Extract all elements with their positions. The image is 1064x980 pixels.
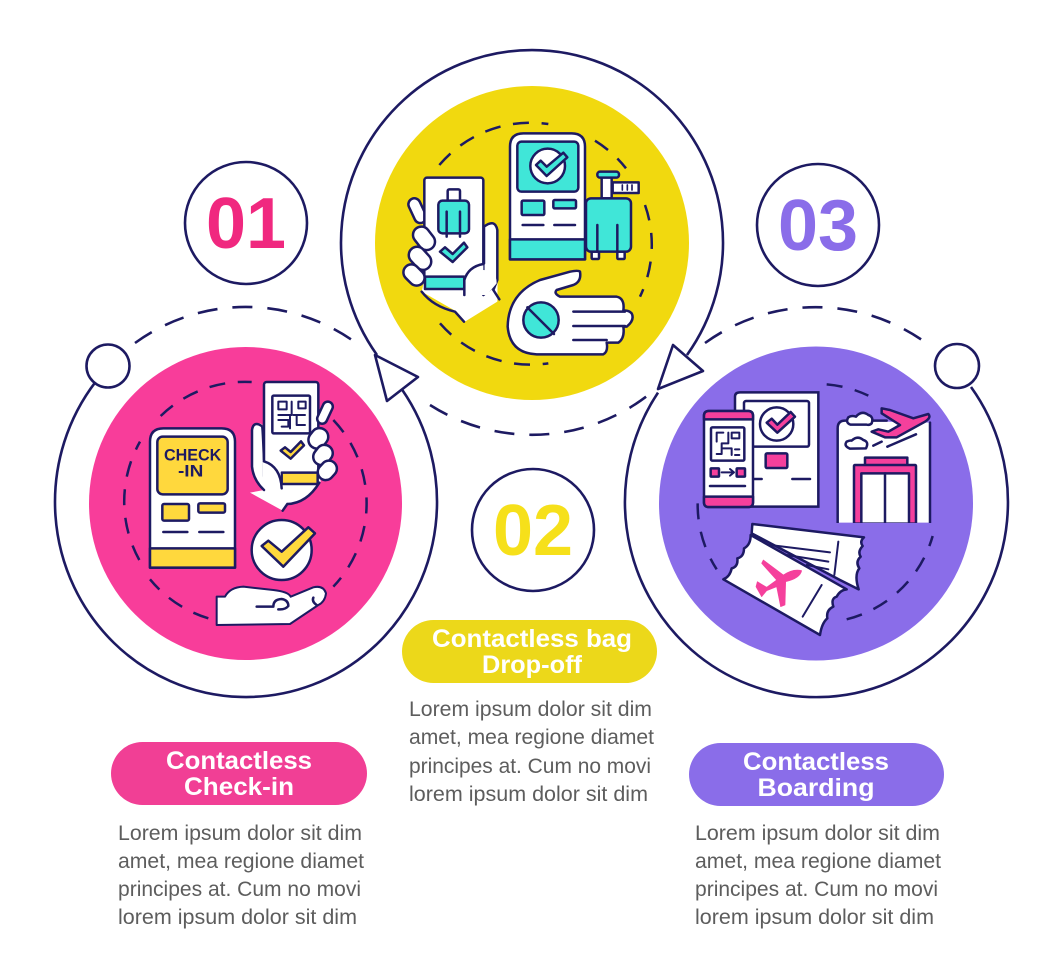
icon: contactless boarding [698, 384, 933, 635]
panel: step 1 circle [55, 307, 437, 697]
text block: step 3 description: lorem ipsum dolor sit dim [695, 906, 934, 929]
text block: step 3 description: Lorem ipsum dolor sit dim [695, 822, 940, 845]
pill heading: Contactless Check-in: Check-in [184, 773, 294, 801]
arrow: right triangle [658, 345, 703, 389]
number badge 01 [185, 162, 307, 284]
text block: step 3 description [695, 822, 941, 929]
pill heading: Contactless Check-in [111, 742, 367, 805]
pill heading: Contactless Check-in: Contactless [166, 747, 312, 775]
text block: step 3 description: amet, mea regione diamet [695, 850, 941, 873]
arrow: left triangle [375, 355, 418, 401]
number badge 02 [472, 469, 594, 591]
pill heading: Contactless bag Drop-off: Contactless bag [432, 625, 632, 653]
text block: step 1 description: lorem ipsum dolor sit dim [118, 906, 357, 929]
text block: step 2 description: Lorem ipsum dolor sit dim [409, 698, 652, 721]
pill heading: Contactless Boarding [689, 743, 944, 806]
icon: contactless check-in: -IN [178, 462, 203, 481]
number badge 03: 03 [778, 186, 858, 266]
text block: step 2 description: lorem ipsum dolor sit dim [409, 783, 648, 806]
text block: step 2 description: principes at. Cum no movi [409, 755, 651, 778]
text block: step 1 description [118, 822, 364, 929]
icon: contactless check-in: CHECK [164, 446, 221, 465]
text block: step 1 description: Lorem ipsum dolor sit dim [118, 822, 362, 845]
number badge 02: 02 [493, 491, 573, 571]
text block: step 2 description: amet, mea regione diamet [409, 726, 654, 749]
pill heading: Contactless Boarding: Boarding [758, 774, 874, 802]
pill heading: Contactless bag Drop-off [402, 620, 657, 683]
text block: step 1 description: principes at. Cum no movi [118, 878, 361, 901]
number badge 01: 01 [206, 184, 286, 264]
text block: step 3 description: principes at. Cum no movi [695, 878, 938, 901]
panel: step 2 circle [341, 50, 723, 435]
text block: step 2 description [409, 698, 654, 806]
icon: contactless bag drop-off [400, 123, 652, 365]
text block: step 1 description: amet, mea regione diamet [118, 850, 364, 873]
icon: contactless check-in [124, 382, 367, 625]
pill heading: Contactless Boarding: Contactless [743, 748, 889, 776]
pill heading: Contactless bag Drop-off: Drop-off [482, 651, 583, 679]
panel: step 3 circle [625, 307, 1008, 697]
number badge 03 [757, 164, 879, 286]
